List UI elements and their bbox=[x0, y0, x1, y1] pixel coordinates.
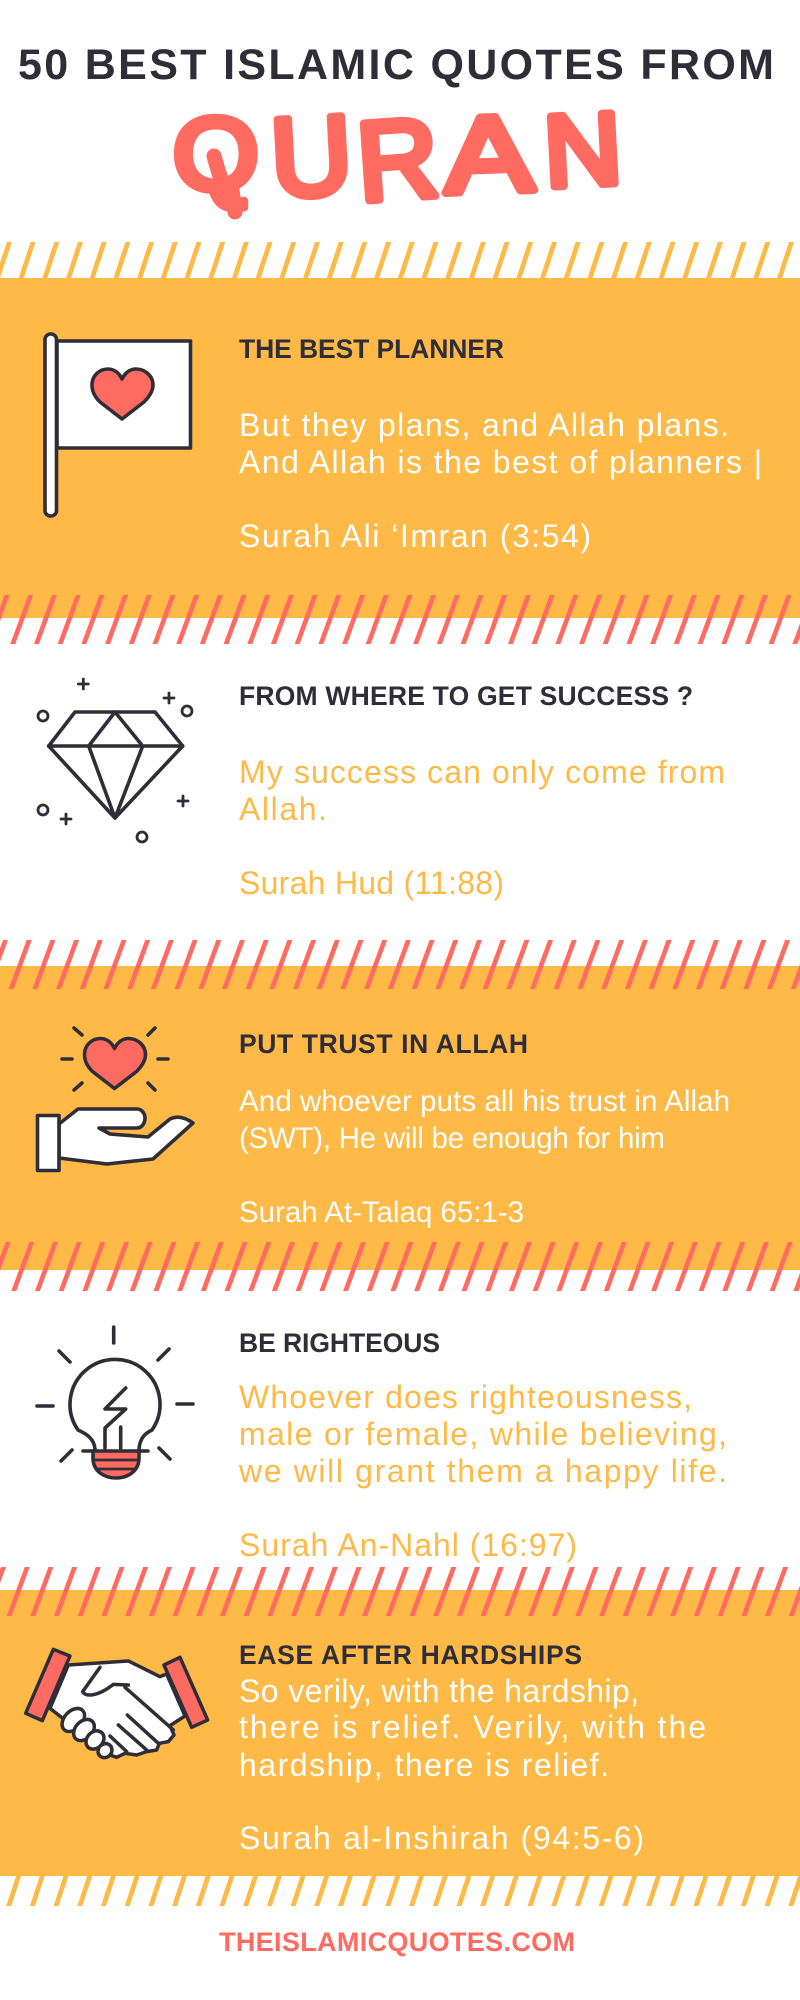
quote text: And Allah is the best of planners | bbox=[239, 444, 762, 480]
quote text: So verily, with the hardship, bbox=[239, 1673, 639, 1709]
panel: be righteous bbox=[0, 1270, 800, 1590]
quote text: (SWT), He will be enough for him bbox=[239, 1122, 665, 1155]
panel: put trust in Allah bbox=[0, 966, 800, 1270]
quote text: there is relief. Verily, with the bbox=[239, 1709, 706, 1745]
source: Surah Hud (11:88) bbox=[239, 865, 504, 901]
quote text bbox=[239, 754, 725, 827]
title word: QURAN: R bbox=[353, 95, 442, 225]
heading: EASE AFTER HARDSHIPS bbox=[239, 1640, 582, 1670]
source: Surah al-Inshirah (94:5-6) bbox=[239, 1820, 644, 1856]
quote text: hardship, there is relief. bbox=[239, 1747, 609, 1783]
heading: PUT TRUST IN ALLAH bbox=[239, 1029, 528, 1059]
source: Surah At-Talaq 65:1-3 bbox=[239, 1196, 524, 1229]
title word: QURAN: N bbox=[541, 91, 624, 209]
quote text bbox=[239, 1673, 706, 1783]
heading: BE RIGHTEOUS bbox=[239, 1328, 440, 1358]
panel: the best planner bbox=[0, 278, 800, 618]
title word: QURAN bbox=[173, 91, 624, 225]
icon: light bulb bbox=[37, 1327, 193, 1478]
heading: FROM WHERE TO GET SUCCESS ? bbox=[239, 681, 693, 711]
quote text: And whoever puts all his trust in Allah bbox=[239, 1085, 730, 1118]
quote text bbox=[239, 407, 762, 480]
title word: QURAN: U bbox=[268, 92, 355, 221]
quote text: But they plans, and Allah plans. bbox=[239, 407, 729, 443]
quote text: male or female, while believing, bbox=[239, 1416, 727, 1452]
icon: handshake bbox=[26, 1649, 208, 1761]
title word: QURAN: Q bbox=[173, 98, 259, 211]
quote text: Whoever does righteousness, bbox=[239, 1379, 692, 1415]
panel: from where to get success bbox=[0, 618, 800, 966]
quote text: My success can only come from bbox=[239, 754, 725, 790]
quote text: we will grant them a happy life. bbox=[238, 1453, 727, 1489]
icon: hand holding heart bbox=[38, 1028, 193, 1170]
icon: diamond bbox=[38, 679, 192, 842]
title word: QURAN: A bbox=[443, 92, 535, 216]
icon: flag with heart bbox=[45, 334, 190, 516]
heading: THE BEST PLANNER bbox=[239, 334, 504, 364]
quote text: Allah. bbox=[239, 791, 327, 827]
footer website: THEISLAMICQUOTES.COM bbox=[219, 1927, 575, 1957]
source: Surah Ali ‘Imran (3:54) bbox=[239, 518, 591, 554]
title: 50 BEST ISLAMIC QUOTES FROM bbox=[18, 41, 774, 89]
quote text bbox=[239, 1085, 730, 1155]
source: Surah An-Nahl (16:97) bbox=[239, 1527, 577, 1563]
quote text bbox=[238, 1379, 727, 1489]
panel: ease after hardships bbox=[0, 1590, 800, 1876]
